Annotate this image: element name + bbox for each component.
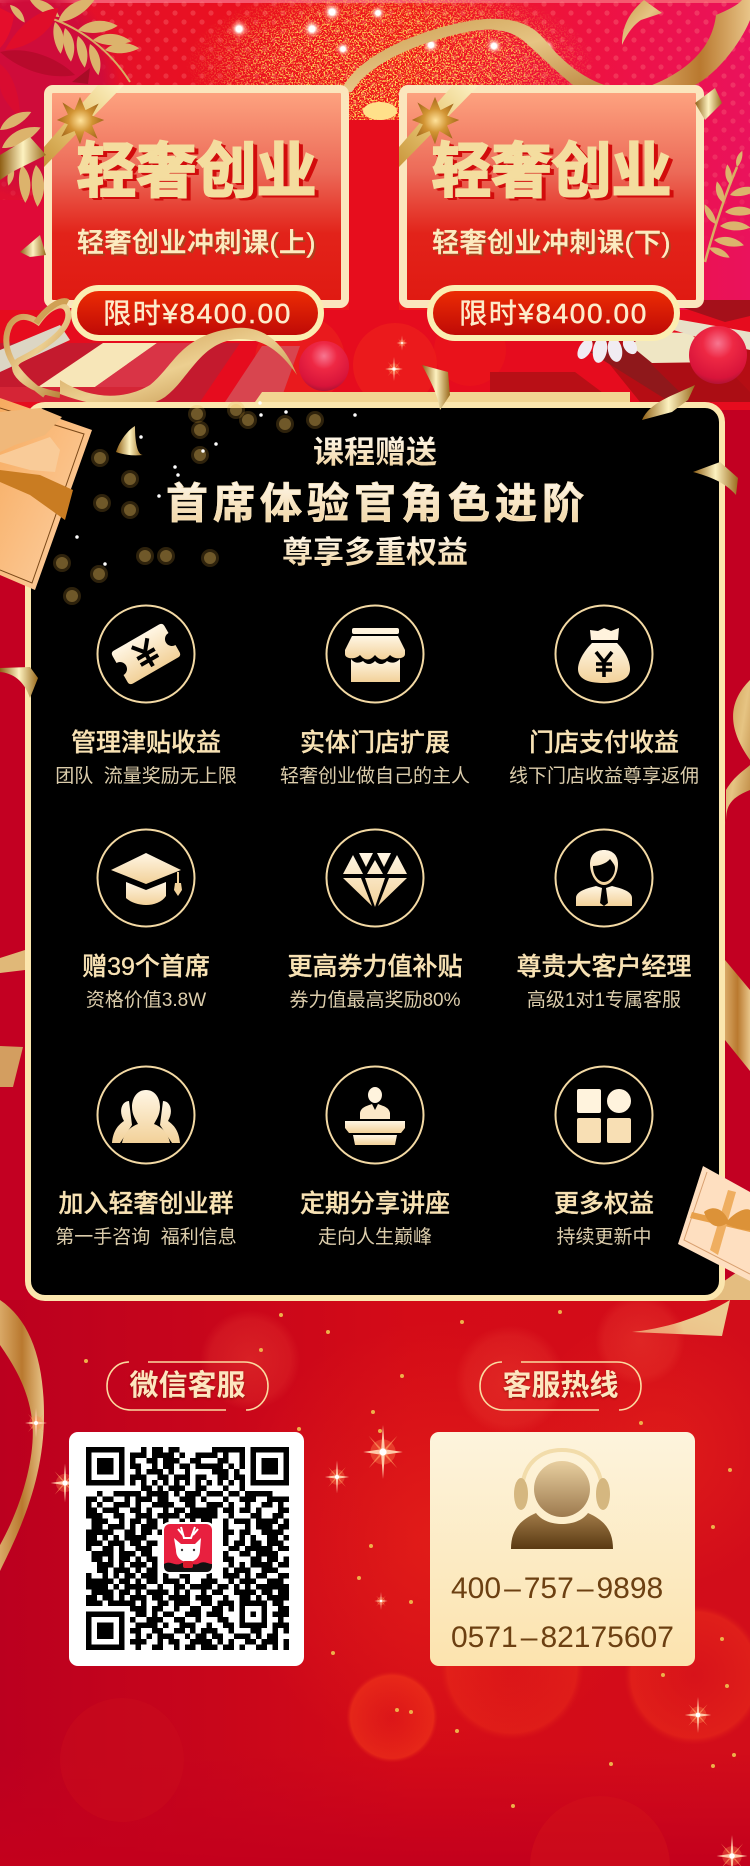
sparkles (25, 336, 747, 1866)
left gift box (0, 398, 92, 590)
right top ribbon (650, 0, 750, 88)
ribbon band card 1 (44, 85, 124, 167)
top edge line (0, 0, 750, 3)
benefit: account manager (516, 828, 692, 1011)
benefit: lectures (300, 1066, 450, 1248)
top gradient (0, 0, 750, 410)
benefit: store expansion (280, 604, 470, 787)
heart ribbon right lobe (36, 301, 68, 323)
benefit: management subsidy (55, 604, 237, 787)
left stripes (0, 325, 300, 402)
benefit: more (554, 1066, 654, 1248)
card: course part 1 (44, 85, 349, 308)
benefit title: 定期分享讲座 (300, 1190, 450, 1218)
benefit note: 轻奢创业做自己的主人 (280, 766, 470, 787)
small curl right (695, 88, 722, 120)
benefit title: 赠39个首席 (82, 953, 210, 981)
tag: WeChat service (106, 1361, 269, 1411)
heading: sub (31, 533, 719, 573)
benefit: voucher subsidy (287, 828, 462, 1011)
benefit note: 券力值最高奖励80% (289, 990, 461, 1011)
price pill (71, 285, 324, 341)
red leaves (0, 8, 90, 118)
benefit title: 门店支付收益 (529, 729, 679, 757)
gold fern (8, 0, 139, 82)
icon: lecturer at podium (326, 1066, 424, 1164)
right stripes (490, 300, 750, 402)
ribbon tip (632, 1300, 730, 1336)
icon: agent avatar (511, 1448, 613, 1549)
benefit note: 资格价值3.8W (86, 990, 206, 1011)
tag: service hotline: 客服热线 (502, 1370, 618, 1402)
card title: 轻奢创业 (432, 138, 672, 205)
bottom glow field (0, 1300, 750, 1866)
benefit: group (55, 1066, 237, 1248)
hotline card (430, 1432, 695, 1666)
benefit note: 走向人生巅峰 (318, 1227, 432, 1248)
halftone dots (2, 2, 750, 222)
heart ribbon (6, 305, 68, 395)
stage glows (255, 314, 506, 407)
card subtitle: 轻奢创业冲刺课(下) (432, 228, 671, 258)
icon: graduation cap (96, 828, 196, 928)
gold curl top right (622, 0, 662, 45)
icon: people group (96, 1066, 196, 1164)
swoosh ribbon (60, 328, 297, 407)
benefit: 39 seats (82, 828, 210, 1011)
left side ribbon pieces (0, 950, 25, 1087)
benefit note: 第一手咨询 福利信息 (55, 1227, 237, 1248)
phone number 1: 400–757–9898 (451, 1572, 663, 1605)
red balls (299, 326, 747, 391)
QR code card (69, 1432, 304, 1666)
panel: benefits (25, 402, 725, 1301)
glitter core (363, 102, 397, 120)
lower left fern (0, 106, 45, 207)
bow card 1 (57, 97, 104, 144)
icon: money bag (554, 604, 654, 704)
benefit note: 团队 流量奖励无上限 (55, 766, 237, 787)
icon: ticket (96, 604, 196, 704)
cream strip (255, 392, 630, 402)
bottom right ribbon (600, 1262, 750, 1338)
benefit title: 尊贵大客户经理 (516, 953, 692, 981)
ribbon band card 2 (399, 85, 479, 167)
tag: WeChat service: 微信客服 (129, 1370, 246, 1402)
price pill: 限时¥8400.00 (459, 298, 648, 329)
benefit note: 高级1对1专属客服 (527, 990, 681, 1011)
heading: sub: 尊享多重权益 (282, 535, 468, 570)
card: course part 2 (399, 85, 704, 308)
right fern (701, 150, 750, 262)
logo: rabbit mascot (162, 1522, 212, 1574)
benefit: store payment (509, 604, 699, 787)
centre curtain (349, 120, 399, 350)
bottom field fade (0, 1750, 750, 1866)
benefit title: 实体门店扩展 (300, 729, 450, 757)
tag: service hotline (479, 1361, 642, 1411)
benefit title: 更高券力值补贴 (287, 953, 462, 981)
lower stage (0, 310, 750, 410)
benefit title: 管理津贴收益 (71, 729, 221, 757)
phone number 2: 0571–82175607 (451, 1621, 674, 1654)
right gift box (678, 1166, 750, 1281)
card title: 轻奢创业 (76, 138, 316, 205)
left lower hue (0, 200, 60, 410)
dark behind leaves (0, 0, 120, 200)
card subtitle: 轻奢创业冲刺课(上) (77, 228, 316, 258)
right side ribbons (725, 680, 750, 1071)
bokeh glows (60, 1295, 750, 1866)
heading: course gift: 课程赠送 (313, 435, 437, 470)
large top ribbon (340, 19, 625, 92)
glitter burst (190, 0, 590, 120)
heading: main (31, 476, 719, 532)
curl left of card 1 (0, 137, 46, 180)
price pill: 限时¥8400.00 (103, 298, 292, 329)
side fields (0, 410, 750, 1310)
icon: manager (554, 828, 654, 928)
gold dust dots (86, 1312, 734, 1806)
small curl (20, 235, 46, 257)
icon: store (326, 604, 424, 704)
benefit note: 持续更新中 (556, 1227, 652, 1248)
heading: main: 首席体验官角色进阶 (166, 480, 589, 527)
bow card 2 (412, 97, 459, 144)
lights (229, 2, 555, 57)
QR code (86, 1447, 289, 1650)
left ribbon over field (0, 1300, 44, 1571)
price pill (427, 285, 680, 341)
gold bokeh (53, 401, 357, 605)
benefit title: 加入轻奢创业群 (58, 1190, 234, 1218)
confetti curls (0, 365, 738, 698)
icon: diamond (326, 828, 424, 928)
flower (574, 335, 640, 364)
benefit title: 更多权益 (554, 1190, 654, 1218)
heading: course gift (31, 433, 719, 473)
icon: grid of shapes (554, 1066, 654, 1164)
benefit note: 线下门店收益尊享返佣 (509, 766, 699, 787)
